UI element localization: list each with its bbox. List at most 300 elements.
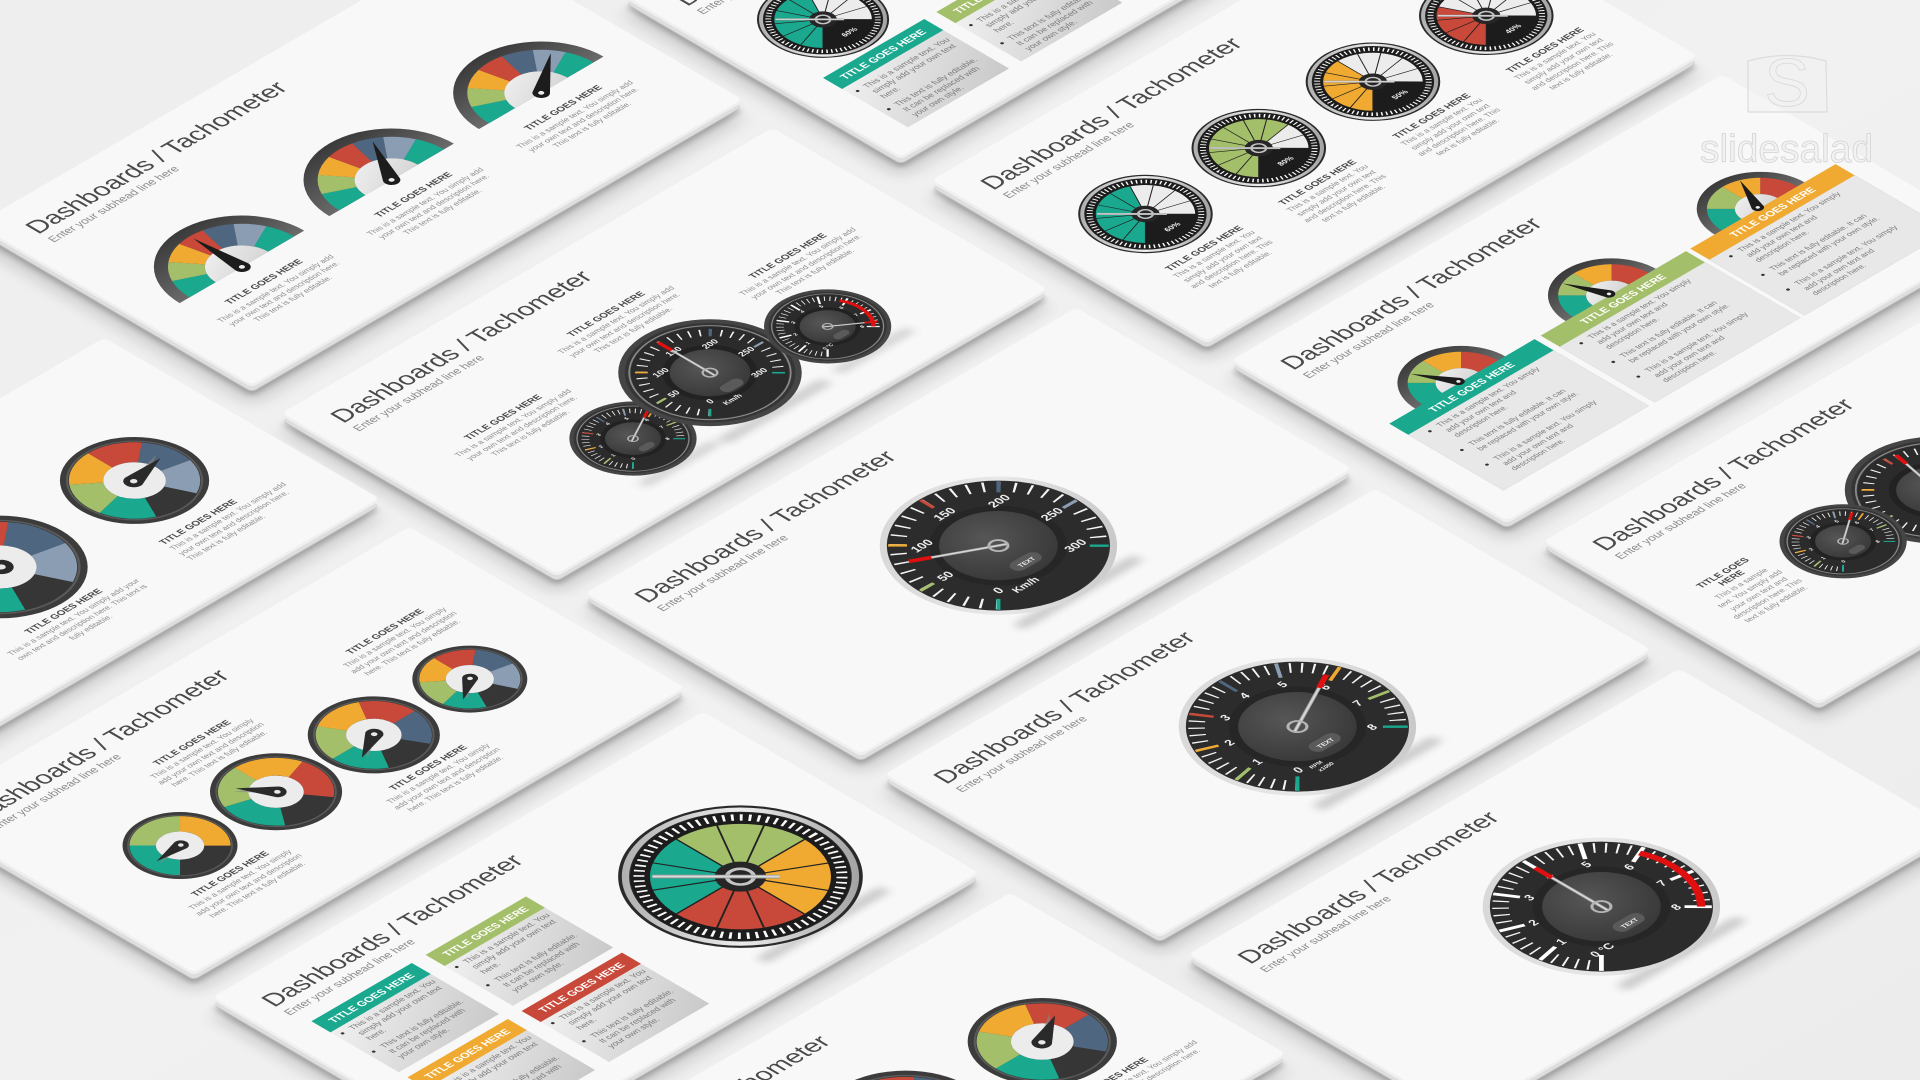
caption 1: and description here. This bbox=[1188, 239, 1275, 290]
caption 4: text is fully editable. bbox=[1547, 51, 1615, 91]
caption B: This is a sample text. You simply add your bbox=[5, 577, 142, 657]
flat gauge right bbox=[937, 980, 1148, 1080]
caption 3: This is a sample text. You simply bbox=[384, 742, 492, 805]
caption: HERE bbox=[1716, 569, 1748, 588]
gauge shadow bbox=[1015, 555, 1142, 629]
box yellow: TITLE GOES HERE bbox=[422, 1027, 514, 1080]
caption: text. You simply add bbox=[1715, 569, 1785, 609]
column green: This is a sample text. You simply bbox=[1586, 278, 1693, 340]
wheel gauge: teal 60%: 60% bbox=[839, 26, 860, 38]
column yellow: TITLE GOES HERE bbox=[1727, 186, 1819, 239]
caption left bbox=[442, 382, 591, 468]
small dial: 8 bbox=[1874, 540, 1882, 544]
column teal: TITLE GOES HERE bbox=[1426, 361, 1518, 414]
title box: teal: This is a sample text. You bbox=[860, 36, 952, 90]
small dial left: 4 bbox=[604, 422, 612, 426]
box green: This is a sample text. You bbox=[460, 911, 552, 965]
slide subtitle: Enter your subhead line here bbox=[282, 938, 419, 1017]
caption left: TITLE GOES HERE bbox=[462, 393, 545, 442]
caption A: This is a sample text. You simply add bbox=[167, 481, 289, 552]
slide subtitle: Enter your subhead line here bbox=[1613, 482, 1750, 561]
flat gauge 3 bbox=[280, 680, 467, 789]
column green bbox=[1541, 251, 1800, 402]
speedometer: 150 bbox=[930, 505, 960, 523]
column teal: This is a sample text. You simply bbox=[1434, 366, 1542, 428]
RPM dial: 7 bbox=[1350, 698, 1367, 708]
wheel shadow bbox=[758, 887, 888, 963]
column teal: add your own text and bbox=[1500, 423, 1576, 467]
caption 2: add your own text and description bbox=[155, 721, 266, 786]
RPM dial: 2 bbox=[1221, 738, 1239, 748]
flat gauge A bbox=[29, 419, 240, 542]
caption 1: simply add your own text bbox=[1181, 234, 1265, 284]
small dial left: 7 bbox=[658, 425, 666, 430]
temperature dial: 1 bbox=[1553, 937, 1570, 947]
needle green column bbox=[1557, 271, 1621, 308]
half gauge teal column bbox=[1371, 331, 1545, 432]
slide: three half gauges bbox=[0, 0, 742, 405]
wheel gauge red 40%: 40% bbox=[1503, 23, 1524, 35]
caption 2 bbox=[136, 710, 275, 791]
small dial left: 8 bbox=[664, 437, 672, 441]
box teal: This is a sample text. You bbox=[346, 978, 438, 1031]
slide title: Dashboards / Tachometer bbox=[255, 851, 530, 1011]
small dial left: 1 bbox=[610, 453, 618, 458]
needle teal column bbox=[1404, 359, 1471, 397]
box teal: your own style. bbox=[394, 1026, 452, 1060]
title box: teal: TITLE GOES HERE bbox=[838, 28, 930, 82]
slide: left two flat gauges bbox=[0, 338, 379, 804]
slide: four flat gauges bbox=[0, 527, 684, 993]
caption 3: text is fully editable. bbox=[1434, 117, 1502, 157]
caption 2: This is a sample text. You simply bbox=[148, 717, 256, 780]
big dial centre: 50 bbox=[665, 389, 682, 399]
RPM dial: 6 bbox=[1317, 682, 1334, 692]
big dial centre: 300 bbox=[748, 366, 770, 379]
slide title: Dashboards / Tachometer bbox=[19, 78, 294, 238]
slide title: Dashboards / Tachometer bbox=[1586, 395, 1861, 555]
caption A: your own text and description here. bbox=[176, 490, 291, 557]
small dial: 7 bbox=[1869, 528, 1876, 532]
needle yellow column bbox=[1718, 177, 1782, 214]
half gauge 3 bbox=[417, 20, 659, 161]
small dial right: 6 bbox=[838, 306, 846, 310]
small dial left: 6 bbox=[644, 418, 651, 423]
box teal: simply add your own text bbox=[355, 984, 445, 1036]
box red bbox=[522, 953, 709, 1062]
caption 3: and description here. This bbox=[1415, 107, 1503, 157]
caption 1: This is a sample text. You simply add bbox=[215, 253, 336, 324]
speedometer: 0 bbox=[989, 585, 1007, 596]
temperature dial: 0 °C bbox=[1587, 941, 1619, 959]
box red: simply add your own text bbox=[565, 974, 655, 1026]
RPM dial: 8 bbox=[1364, 722, 1381, 732]
caption 1: This is a sample text. You bbox=[1171, 229, 1257, 279]
box teal: It can be replaced with bbox=[386, 1007, 468, 1055]
caption: This is a sample bbox=[1713, 567, 1771, 601]
RPM dial: RPM bbox=[1309, 760, 1325, 770]
small dial left: 0 bbox=[630, 457, 638, 461]
caption 3: This text is fully editable. bbox=[551, 100, 634, 149]
box red: This text is fully editable. bbox=[587, 988, 676, 1039]
dial shadows bbox=[639, 328, 917, 489]
caption 2: TITLE GOES HERE bbox=[372, 171, 456, 219]
column green: This is a sample text. You simply bbox=[1643, 311, 1750, 374]
caption 4: This is a sample text. You bbox=[1512, 31, 1598, 81]
caption 2: TITLE GOES HERE bbox=[151, 719, 234, 767]
caption 1 bbox=[1160, 223, 1284, 295]
slide subtitle: Enter your subhead line here bbox=[954, 715, 1091, 794]
speedometer: 300 bbox=[1061, 537, 1091, 554]
caption 3: your own text and description here. bbox=[526, 86, 641, 153]
wheel gauge teal 60%: 60% bbox=[1162, 221, 1183, 233]
temperature dial bbox=[1417, 799, 1786, 1014]
caption 1 bbox=[174, 841, 313, 922]
box red: TITLE GOES HERE bbox=[536, 961, 628, 1015]
small dial right bbox=[738, 274, 918, 379]
column green: TITLE GOES HERE bbox=[1578, 273, 1670, 326]
speedometer: 50 bbox=[934, 569, 958, 583]
small dial right: 4 bbox=[799, 310, 807, 314]
column yellow: description here. bbox=[1810, 262, 1869, 297]
caption 2: simply add your own text bbox=[1294, 169, 1379, 218]
column green: description here. bbox=[1660, 349, 1719, 384]
caption 3: simply add your own text bbox=[1408, 102, 1493, 151]
column teal: description here. bbox=[1452, 404, 1510, 438]
small dial right: 2 bbox=[792, 333, 800, 337]
caption 1 bbox=[203, 246, 354, 334]
caption: text is fully editable. bbox=[1742, 584, 1810, 624]
column teal: description here. bbox=[1509, 437, 1568, 472]
slide: cluster of three dials bbox=[282, 128, 1047, 594]
temperature dial: 3 bbox=[1521, 893, 1538, 903]
column teal: add your own text and bbox=[1443, 389, 1519, 433]
caption 4: TITLE GOES HERE bbox=[1504, 26, 1587, 75]
title box: green: your own style. bbox=[1022, 18, 1080, 52]
big dial centre: 150 bbox=[663, 345, 684, 358]
gauge shadow bbox=[1314, 736, 1441, 810]
caption A: TITLE GOES HERE bbox=[157, 498, 240, 547]
speedometer: 100 bbox=[907, 537, 937, 555]
box green: simply add your own text bbox=[469, 918, 559, 970]
caption: TITLE GOES bbox=[1694, 556, 1752, 590]
small dial: 1 bbox=[1820, 556, 1828, 561]
column teal: This is a sample text. You simply bbox=[1491, 399, 1599, 462]
big dial centre: 250 bbox=[736, 345, 757, 358]
speedometer: 250 bbox=[1037, 506, 1067, 523]
speedometer: Km/h bbox=[1009, 575, 1043, 595]
box green: This text is fully editable. bbox=[491, 932, 580, 983]
caption middle bbox=[545, 279, 694, 365]
caption 2: here. This text is fully editable. bbox=[169, 729, 270, 788]
caption 1: text is fully editable. bbox=[1206, 249, 1274, 289]
slide subtitle: Enter your subhead line here bbox=[351, 354, 488, 433]
box green: TITLE GOES HERE bbox=[440, 905, 532, 959]
slide title: Dashboards / Tachometer bbox=[974, 34, 1249, 194]
caption 2 bbox=[353, 159, 503, 247]
small dial right: 5 bbox=[818, 304, 826, 309]
box teal: here. bbox=[363, 1027, 389, 1042]
title box: teal: This text is fully editable. bbox=[891, 56, 980, 108]
box green: your own style. bbox=[509, 960, 566, 993]
column yellow: add your own text and bbox=[1744, 214, 1820, 258]
big dial centre: 100 bbox=[650, 366, 671, 379]
wheel gauge: teal 60% bbox=[730, 0, 916, 74]
column yellow: This text is fully editable. It can bbox=[1767, 213, 1869, 272]
title box: green bbox=[936, 0, 1122, 61]
small dial bbox=[1753, 489, 1920, 594]
caption right: This is a sample text. You simply add bbox=[737, 226, 858, 297]
caption 4: simply add your own text bbox=[1522, 36, 1606, 85]
temperature dial: 2 bbox=[1525, 918, 1543, 928]
slide: right two dials bbox=[1544, 256, 1920, 722]
speedometer bbox=[831, 448, 1166, 643]
caption 3: here. This text is fully editable. bbox=[405, 754, 506, 813]
caption 1: TITLE GOES HERE bbox=[223, 258, 306, 306]
small dial left: 5 bbox=[623, 417, 631, 421]
caption 1: TITLE GOES HERE bbox=[1163, 224, 1246, 273]
small dial left: 2 bbox=[598, 445, 605, 449]
caption 3: This is a sample text. You bbox=[1399, 97, 1485, 147]
slide: wheel with four title boxes bbox=[213, 712, 978, 1080]
column yellow: add your own text and bbox=[1801, 248, 1877, 292]
RPM dial bbox=[1130, 629, 1465, 824]
column yellow: be replaced with your own style. bbox=[1776, 215, 1882, 277]
caption 3: This is a sample text. You simply add bbox=[514, 79, 636, 150]
slide title: Dashboards / Tachometer bbox=[927, 628, 1202, 788]
caption 2: and description here. This bbox=[1301, 173, 1388, 224]
slide title: Dashboards / Tachometer bbox=[628, 447, 903, 607]
half gauge 2 bbox=[267, 107, 509, 248]
column yellow: This is a sample text. You simply bbox=[1792, 224, 1900, 287]
slide: single speedometer bbox=[586, 308, 1351, 774]
caption 1: This is a sample text. You simply bbox=[186, 848, 294, 911]
caption 1: This text is fully editable. bbox=[251, 275, 335, 323]
speedometer: TEXT bbox=[1017, 556, 1039, 569]
caption 2: text is fully editable. bbox=[1319, 184, 1388, 223]
watermark logo bbox=[1700, 45, 1873, 171]
title box: teal: your own style. bbox=[909, 84, 966, 118]
big wheel gauge bbox=[567, 776, 913, 977]
column yellow: This is a sample text. You simply bbox=[1735, 191, 1843, 253]
slide: half gauges with coloured columns bbox=[1232, 75, 1920, 541]
column yellow: description here. bbox=[1753, 229, 1811, 263]
title box: green: here. bbox=[991, 19, 1016, 34]
small dial: 2 bbox=[1808, 547, 1816, 552]
box red: This is a sample text. You bbox=[556, 967, 648, 1021]
logo wordmark: slidesalad bbox=[1700, 128, 1873, 171]
column teal bbox=[1389, 339, 1649, 490]
temperature dial: 7 bbox=[1654, 878, 1671, 888]
slide title: Dashboards / Tachometer bbox=[324, 267, 599, 427]
column green: description here. bbox=[1603, 316, 1662, 350]
caption 1: here. This text is fully editable. bbox=[207, 860, 308, 919]
wheel gauge yellow 50%: 50% bbox=[1389, 88, 1410, 101]
slide subtitle: Enter your subhead line here bbox=[1258, 895, 1395, 974]
slide subtitle: Enter your subhead line here bbox=[1001, 121, 1138, 200]
wheel gauge green 80% bbox=[1164, 93, 1354, 204]
box red: here. bbox=[574, 1016, 599, 1031]
box red: your own style. bbox=[605, 1016, 662, 1049]
caption 3 bbox=[372, 735, 511, 816]
half gauge yellow column bbox=[1670, 156, 1845, 258]
caption 2: your own text and description here. bbox=[376, 173, 492, 240]
box red: It can be replaced with bbox=[596, 996, 678, 1044]
caption 2: TITLE GOES HERE bbox=[1276, 158, 1360, 207]
RPM dial: 1 bbox=[1249, 757, 1266, 767]
RPM dial: 4 bbox=[1236, 691, 1254, 701]
flat gauge B bbox=[0, 494, 124, 640]
slide: RPM gauge bbox=[885, 489, 1650, 955]
column teal: This text is fully editable. It can bbox=[1466, 388, 1568, 447]
temperature dial: 4 bbox=[1540, 871, 1558, 881]
gauge shadow bbox=[1618, 916, 1745, 990]
small dial left: 3 bbox=[595, 433, 603, 437]
small dial: 6 bbox=[1854, 521, 1861, 525]
temperature dial: TEXT bbox=[1620, 917, 1642, 930]
wheel gauge green 80%: 80% bbox=[1275, 155, 1296, 167]
caption B: TITLE GOES HERE bbox=[22, 587, 106, 636]
small dial: 3 bbox=[1806, 536, 1813, 540]
box green bbox=[426, 897, 613, 1006]
column green: add your own text and bbox=[1651, 335, 1727, 379]
caption 4 bbox=[329, 599, 468, 680]
caption 1: TITLE GOES HERE bbox=[189, 850, 272, 898]
small dial: 4 bbox=[1815, 525, 1822, 529]
caption right: your own text and description here. bbox=[749, 233, 864, 300]
caption 1: add your own text and description bbox=[193, 852, 304, 917]
flat gauge 1 bbox=[99, 798, 261, 893]
column green: This text is fully editable. It can bbox=[1618, 300, 1720, 359]
small dial: 5 bbox=[1833, 519, 1841, 524]
caption middle: This text is fully editable. bbox=[592, 306, 675, 354]
title box: green: It can be replaced with bbox=[1013, 0, 1096, 47]
caption 4: and description here. This bbox=[1529, 41, 1616, 91]
temperature dial: 8 bbox=[1668, 902, 1685, 912]
RPM dial: x1000 bbox=[1317, 762, 1336, 773]
temperature dial: 6 bbox=[1621, 862, 1638, 872]
RPM dial: 0 bbox=[1290, 765, 1307, 775]
caption middle: This is a sample text. You simply add bbox=[556, 285, 677, 355]
caption 4: here. This text is fully editable. bbox=[362, 618, 463, 677]
caption right: TITLE GOES HERE bbox=[747, 232, 830, 280]
caption left: your own text and description here. bbox=[464, 395, 580, 462]
caption 3: TITLE GOES HERE bbox=[1391, 92, 1474, 141]
small dial left bbox=[543, 386, 723, 491]
RPM dial: 3 bbox=[1217, 713, 1234, 723]
small dial right: 0 °C bbox=[822, 343, 836, 351]
title box: teal: here. bbox=[878, 85, 903, 100]
slide subtitle: Enter your subhead line here bbox=[46, 165, 183, 244]
caption 3: TITLE GOES HERE bbox=[522, 84, 605, 132]
slide: four wheel gauges bbox=[932, 0, 1697, 361]
caption 1: your own text and description here. bbox=[227, 260, 342, 327]
caption 2: This text is fully editable. bbox=[401, 188, 484, 236]
caption A: This text is fully editable. bbox=[185, 513, 268, 562]
title box: teal bbox=[823, 19, 1009, 127]
small dial right: 7 bbox=[853, 313, 861, 317]
caption 3: TITLE GOES HERE bbox=[387, 744, 470, 792]
caption 4: TITLE GOES HERE bbox=[344, 608, 427, 656]
temperature dial: 5 bbox=[1578, 860, 1596, 870]
box green: It can be replaced with bbox=[500, 940, 582, 988]
half gauge 1 bbox=[117, 194, 359, 335]
slide: temperature gauge bbox=[1189, 669, 1920, 1080]
big dial centre: Km/h bbox=[720, 392, 745, 406]
big dial centre bbox=[580, 297, 840, 448]
caption 2: This is a sample text. You simply add bbox=[365, 166, 486, 237]
wheel gauge yellow 50% bbox=[1278, 26, 1468, 137]
small dial: 0 bbox=[1840, 560, 1848, 564]
caption 3: add your own text and description bbox=[391, 746, 502, 811]
slide subtitle: Enter your subhead line here bbox=[1301, 301, 1438, 380]
caption: your own text and bbox=[1728, 576, 1790, 612]
box teal bbox=[311, 963, 499, 1072]
logo badge bbox=[1748, 56, 1827, 112]
small dial right: 1 bbox=[804, 341, 812, 346]
title box: teal: It can be replaced with bbox=[900, 65, 982, 113]
wheel gauge teal 60% bbox=[1050, 159, 1241, 269]
caption right: This text is fully editable. bbox=[774, 248, 857, 296]
caption B: own text and description here. This text is bbox=[15, 583, 150, 661]
box teal: TITLE GOES HERE bbox=[326, 971, 418, 1025]
caption middle: TITLE GOES HERE bbox=[565, 290, 648, 339]
big dial centre: 200 bbox=[699, 338, 721, 350]
caption A bbox=[157, 475, 306, 562]
caption middle: your own text and description here. bbox=[567, 291, 682, 358]
big dial bbox=[1807, 414, 1920, 566]
half gauge green column bbox=[1522, 243, 1696, 345]
small dial right: 3 bbox=[790, 321, 798, 325]
RPM dial: 5 bbox=[1274, 680, 1292, 690]
slide subtitle: Enter your subhead line here bbox=[655, 534, 792, 613]
slide: top wheel gauges with title boxes bbox=[626, 0, 1391, 177]
flat gauge left bbox=[781, 1049, 1030, 1080]
caption right bbox=[727, 220, 876, 307]
title box: teal: simply add your own text bbox=[869, 42, 959, 95]
caption 2: This is a sample text. You bbox=[1284, 163, 1371, 213]
box teal: This text is fully editable. bbox=[377, 998, 466, 1050]
flat gauge 4 bbox=[389, 632, 551, 726]
wheel gauge red 40% bbox=[1391, 0, 1581, 71]
big dial centre: 0 bbox=[704, 398, 716, 405]
column green: add your own text and bbox=[1594, 301, 1670, 345]
logo letter: S bbox=[1764, 45, 1810, 121]
caption left: This text is fully editable. bbox=[489, 409, 572, 457]
RPM dial: TEXT bbox=[1316, 737, 1338, 750]
slide title: Dashboards / Tachometer bbox=[1231, 808, 1506, 968]
slide: bottom flat gauges bbox=[520, 893, 1285, 1080]
caption B: fully editable. bbox=[67, 613, 115, 641]
caption 4 bbox=[1501, 25, 1625, 96]
caption bbox=[1686, 551, 1813, 625]
column teal: be replaced with your own style. bbox=[1475, 390, 1581, 452]
speedometer: 200 bbox=[984, 492, 1014, 510]
caption 2 bbox=[1274, 157, 1397, 229]
column yellow bbox=[1690, 164, 1920, 315]
caption 4: This is a sample text. You simply bbox=[341, 606, 449, 669]
caption left: This is a sample text. You simply add bbox=[453, 388, 574, 458]
slide title: Dashboards / Tachometer bbox=[1274, 214, 1549, 374]
caption: description here. This bbox=[1731, 578, 1804, 620]
caption 4: add your own text and description bbox=[348, 610, 459, 675]
box green: here. bbox=[478, 960, 503, 975]
small dial right: 8 bbox=[859, 325, 867, 329]
flat gauge 2 bbox=[183, 737, 369, 846]
caption 3 bbox=[1388, 90, 1511, 162]
column green: be replaced with your own style. bbox=[1626, 302, 1732, 364]
caption 3 bbox=[502, 72, 653, 160]
